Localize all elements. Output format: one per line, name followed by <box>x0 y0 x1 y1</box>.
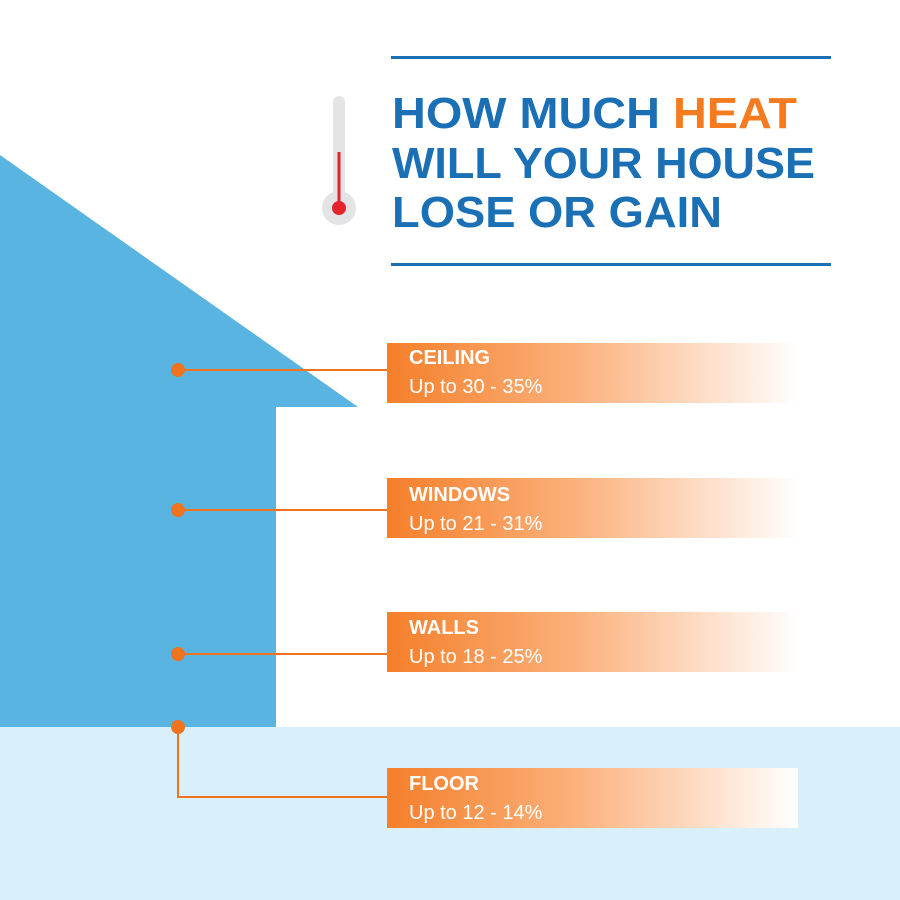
callout: ceiling: CEILING <box>409 347 490 369</box>
ground <box>0 727 900 900</box>
house silhouette <box>0 155 358 727</box>
callout: windows <box>171 478 800 538</box>
callout: floor: FLOOR <box>409 773 480 795</box>
callout: floor: Up to 12 - 14% <box>409 802 543 824</box>
title: WILL YOUR HOUSE <box>392 139 815 188</box>
title: HOW MUCH HEAT <box>392 89 797 138</box>
title <box>391 56 831 266</box>
callout: walls <box>171 612 800 672</box>
callout: walls: WALLS <box>409 617 479 639</box>
title: LOSE OR GAIN <box>392 188 722 237</box>
callout: ceiling <box>171 343 800 403</box>
callout: windows: Up to 21 - 31% <box>409 513 543 535</box>
callout: walls: Up to 18 - 25% <box>409 646 543 668</box>
thermometer icon <box>322 96 356 225</box>
callout: floor <box>171 720 798 828</box>
callout: windows: WINDOWS <box>409 484 510 506</box>
callout: ceiling: Up to 30 - 35% <box>409 376 543 398</box>
